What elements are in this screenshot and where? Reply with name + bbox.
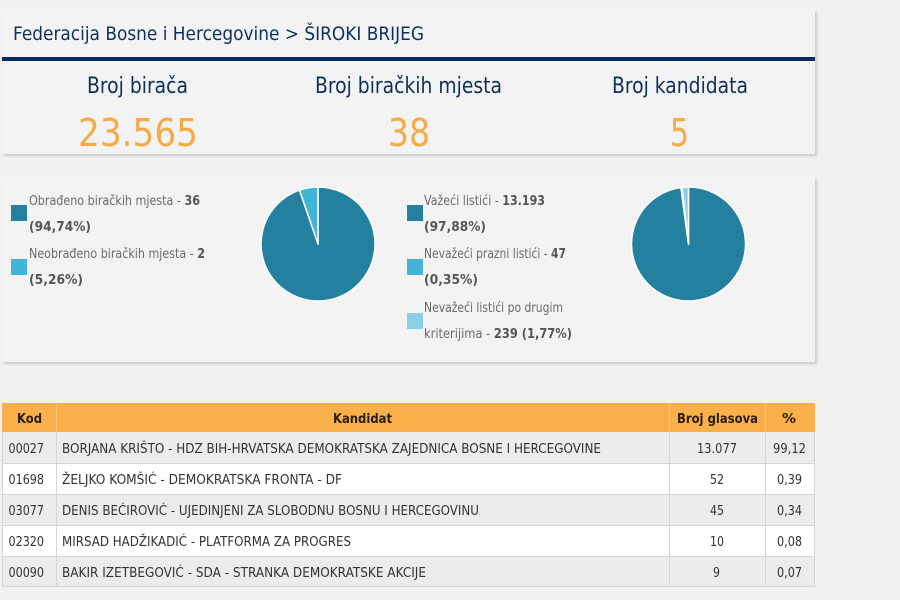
row: Krišto: 13.077 [697, 442, 737, 457]
legend: polling stations processed [11, 194, 205, 288]
row: Komšić [8, 472, 802, 488]
row: Bećirović: 03077 [8, 504, 44, 519]
stat: voters: 23.565 [78, 111, 198, 155]
row: Komšić: 52 [710, 473, 724, 488]
row: Hadžikadić: 02320 [8, 535, 44, 550]
stat: candidates: 5 [670, 111, 689, 155]
table header: Kod [17, 412, 42, 427]
row: Krišto: 99,12 [773, 442, 806, 457]
legend: polling stations processed: Neobrađeno biračkih mjesta - 2 [29, 247, 205, 262]
row: Hadžikadić: MIRSAD HADŽIKADIĆ - PLATFORMA ZA PROGRES [62, 534, 351, 550]
table: candidate results [2, 403, 815, 587]
row: Bećirović [8, 503, 802, 519]
table header [2, 403, 815, 432]
table header: Broj glasova [677, 412, 758, 427]
row: Izetbegović: 9 [713, 566, 720, 581]
stat: polling stations [315, 74, 502, 155]
legend: ballots [407, 194, 572, 342]
row: Krišto: BORJANA KRIŠTO - HDZ BIH-HRVATSKA DEMOKRATSKA ZAJEDNICA BOSNE I HERCEGOVINE [62, 441, 601, 457]
legend: polling stations processed: Obrađeno biračkih mjesta - 36 [29, 194, 200, 209]
panel: summary header [2, 10, 815, 155]
row: Izetbegović: 00090 [8, 566, 44, 581]
legend: polling stations processed: (94,74%) [29, 220, 91, 235]
panel: charts [2, 177, 815, 362]
row: Hadžikadić [8, 534, 802, 550]
stat: candidates: Broj kandidata [612, 74, 748, 99]
stat: voters: Broj birača [87, 74, 188, 99]
stat: candidates [612, 74, 748, 155]
legend: ballots: (97,88%) [424, 220, 486, 235]
legend: polling stations processed: (5,26%) [29, 273, 83, 288]
legend: ballots: Nevažeći prazni listići - 47 [424, 247, 566, 262]
row: Komšić: 0,39 [777, 473, 802, 488]
legend: ballots: kriterijima - 239 (1,77%) [424, 327, 572, 342]
table header: % [782, 412, 796, 427]
row: Hadžikadić: 10 [710, 535, 724, 550]
row: Krišto: 00027 [8, 442, 44, 457]
legend: ballots: Nevažeći listići po drugim [424, 301, 563, 316]
stat: voters [78, 74, 198, 155]
row: Bećirović: DENIS BEĆIROVIĆ - UJEDINJENI ZA SLOBODNU BOSNU I HERCEGOVINU [62, 503, 479, 519]
legend: ballots: (0,35%) [424, 273, 478, 288]
row: Bećirović: 45 [710, 504, 724, 519]
row: Izetbegović: 0,07 [777, 566, 802, 581]
pie chart: polling stations [261, 187, 375, 301]
row: Komšić: 01698 [8, 473, 44, 488]
row: Komšić: ŽELJKO KOMŠIĆ - DEMOKRATSKA FRONTA - DF [62, 472, 342, 488]
row: Hadžikadić: 0,08 [777, 535, 802, 550]
legend: ballots: Važeći listići - 13.193 [424, 194, 545, 209]
pie chart: ballots [632, 187, 746, 301]
stat: polling stations: Broj biračkih mjesta [315, 74, 502, 99]
stat: polling stations: 38 [388, 111, 430, 155]
row: Izetbegović [8, 565, 802, 581]
row: Bećirović: 0,34 [777, 504, 802, 519]
table header: Kandidat [333, 412, 392, 427]
title: location breadcrumb: Federacija Bosne i Hercegovine > ŠIROKI BRIJEG [13, 21, 424, 45]
row: Izetbegović: BAKIR IZETBEGOVIĆ - SDA - STRANKA DEMOKRATSKE AKCIJE [62, 565, 426, 581]
row: Krišto [8, 441, 806, 457]
